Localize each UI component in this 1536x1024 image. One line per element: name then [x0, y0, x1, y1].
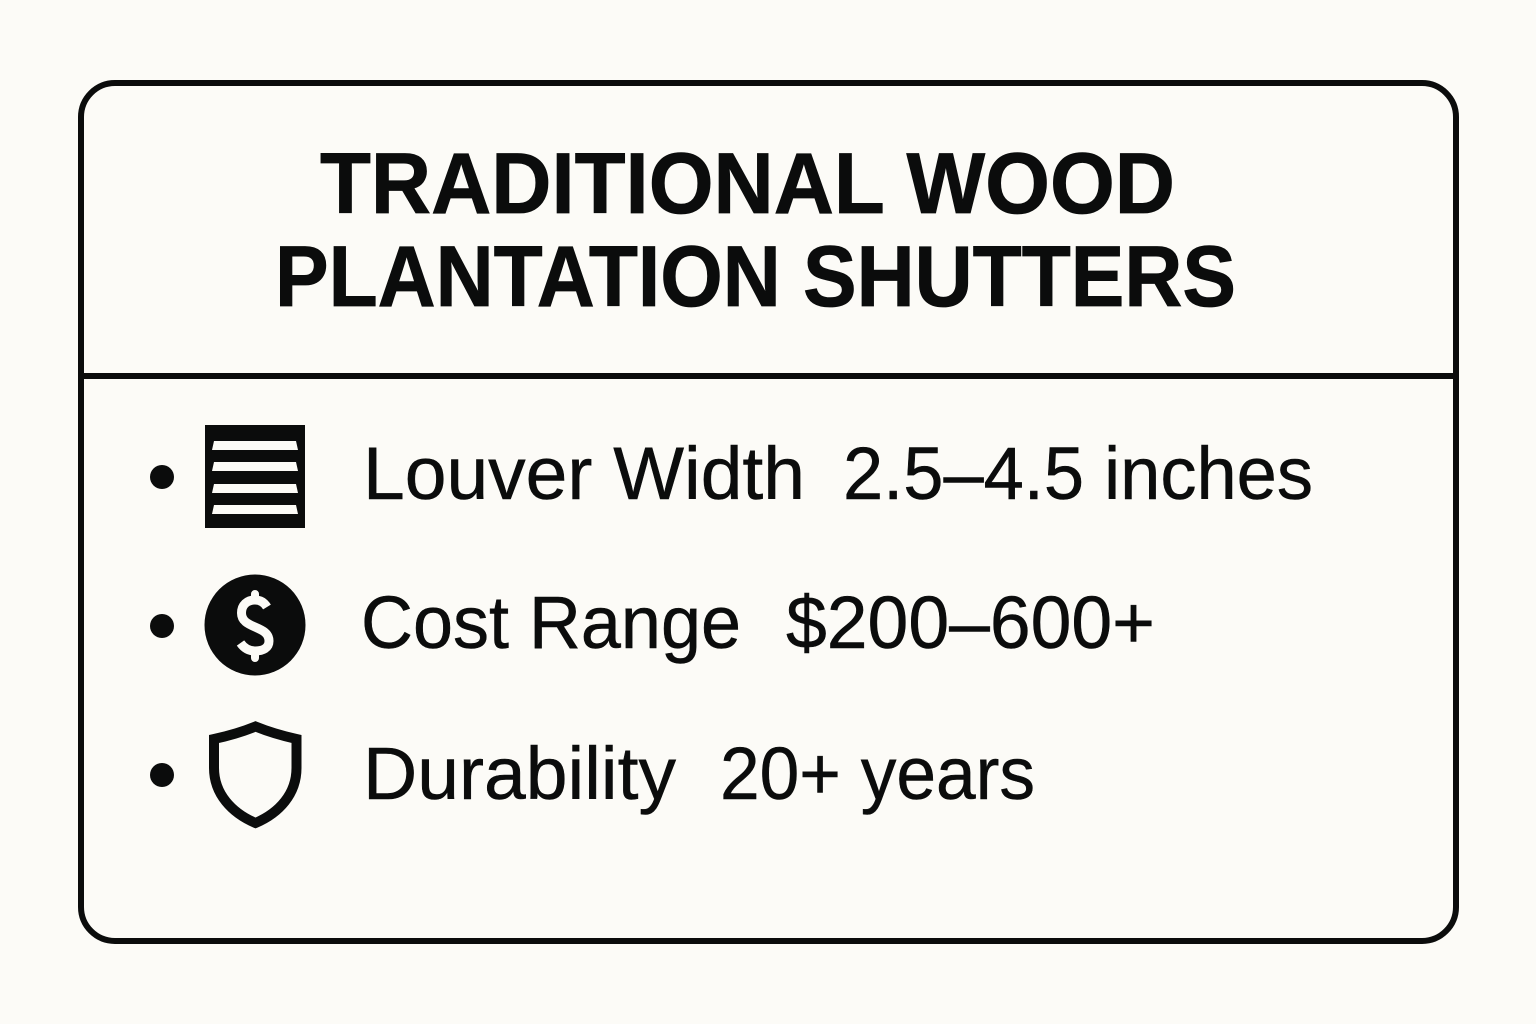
- panel: card outline: [81, 83, 1456, 941]
- row: louver width: [150, 425, 1313, 528]
- bullet: [150, 763, 174, 787]
- row: cost range: [150, 574, 1155, 676]
- icon: dollar coin: [204, 574, 306, 676]
- value: louver width: 2.5–4.5 inches: [843, 432, 1313, 515]
- label: louver width: Louver Width: [363, 432, 805, 515]
- icon: shield: [214, 726, 296, 823]
- row: durability: [150, 726, 1035, 823]
- label: durability: Durability: [363, 732, 676, 815]
- bullet: [150, 614, 174, 638]
- title: PLANTATION SHUTTERS: [275, 229, 1236, 325]
- title: [275, 136, 1236, 325]
- value: durability: 20+ years: [720, 732, 1035, 815]
- bullet: [150, 465, 174, 489]
- value: cost range: $200–600+: [786, 581, 1155, 664]
- label: cost range: Cost Range: [361, 581, 741, 664]
- title: TRADITIONAL WOOD: [320, 136, 1175, 232]
- icon: louvers: [205, 425, 305, 528]
